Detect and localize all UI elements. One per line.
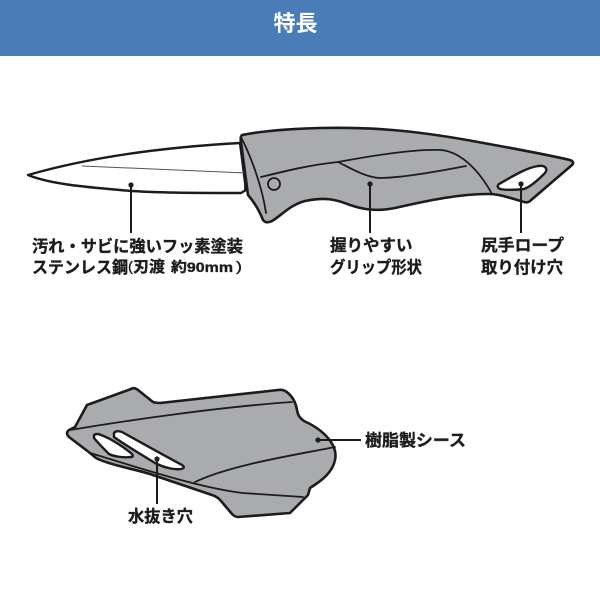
leader: grip xyxy=(367,181,373,233)
leader: lanyard hole xyxy=(518,181,524,233)
label: blade line 2: ) xyxy=(236,258,242,274)
label: drain hole: 水抜き穴 xyxy=(128,507,193,526)
label: blade line 2: 約90mm xyxy=(171,259,233,275)
label: lanyard: 尻手ロープ xyxy=(481,235,565,255)
label: blade line 2: 刃渡 xyxy=(133,258,165,276)
header band xyxy=(0,0,600,56)
label: blade line 2: ステンレス鋼 xyxy=(32,258,128,277)
sheath body xyxy=(67,388,336,517)
leader: drain hole xyxy=(154,456,160,504)
handle contour lines xyxy=(242,139,492,213)
label: blade line 2: ( xyxy=(128,258,133,274)
blade xyxy=(28,143,246,193)
leader: sheath xyxy=(315,437,361,443)
rivet xyxy=(268,178,280,190)
label: grip: 握りやすい xyxy=(330,236,412,255)
knife illustration xyxy=(28,128,573,222)
drain slot 2 xyxy=(114,431,184,469)
label: sheath: 樹脂製シース xyxy=(365,431,466,450)
sheath illustration xyxy=(67,388,336,517)
drain slot 1 xyxy=(94,434,133,457)
sheath contour lines xyxy=(70,402,335,497)
handle xyxy=(241,128,573,222)
label: lanyard line 2: 取り付け穴 xyxy=(481,258,563,277)
title: 特長 xyxy=(273,11,318,36)
lanyard hole xyxy=(498,166,546,190)
label: grip line 2: グリップ形状 xyxy=(330,257,422,277)
label: blade: 汚れ・サビに強いフッ素塗装 xyxy=(32,236,243,256)
label: blade line 2 xyxy=(32,258,242,277)
leader: blade xyxy=(128,182,134,233)
